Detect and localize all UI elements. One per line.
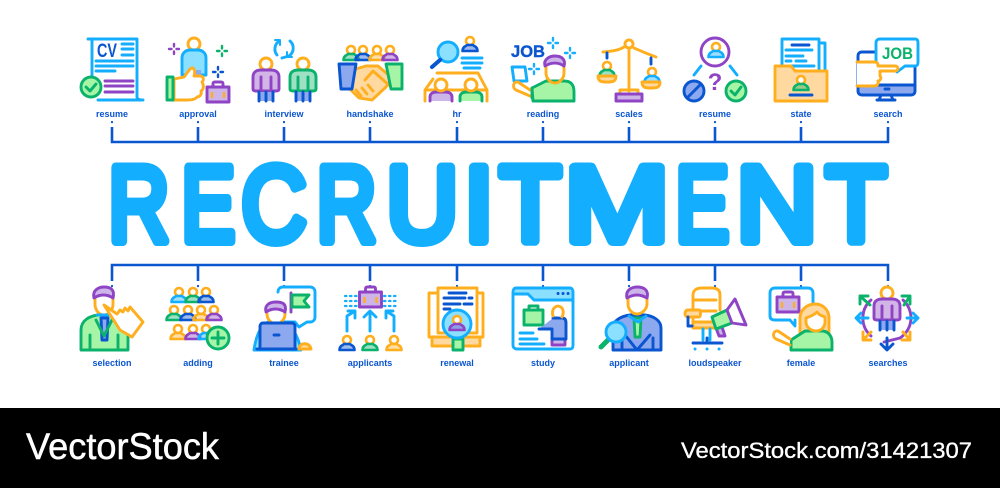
title: R [108,144,170,264]
labels: top row: resume [699,109,731,119]
labels: top row: handshake [346,109,394,119]
title: I [464,144,494,264]
icon: resume CV [81,39,143,100]
title: T [826,144,886,264]
labels: top row: approval [179,109,217,119]
icon: approval thumbs up [167,38,229,102]
icon: adding [166,288,229,349]
labels: bottom row: female [787,358,815,368]
icon: reading job: JOB [511,42,545,61]
icon: applicant [601,287,661,350]
icon: female [770,288,832,350]
icon: resume decision tree: ? [708,69,722,96]
labels: bottom row: adding [183,358,213,368]
icon: renewal [429,288,483,350]
title: C [242,144,306,264]
title: N [736,144,817,264]
labels: bottom row: applicants [348,358,392,368]
footer url: VectorStock.com/31421307 [681,438,972,463]
icon: searches [856,287,918,350]
connector: bottom tree [112,265,888,286]
icon: state folder [775,39,827,101]
labels: bottom row [92,358,908,368]
title: E [181,144,235,264]
labels: top row: search [873,109,903,119]
labels: bottom row: study [531,358,555,368]
labels: top row: state [790,109,812,119]
labels: bottom row: loudspeaker [688,358,742,368]
labels: top row: hr [452,109,462,119]
labels: bottom row: trainee [269,358,299,368]
icon: handshake [339,46,402,100]
icon: study [513,288,573,349]
labels: bottom row: applicant [609,358,649,368]
connector: top tree [112,122,888,142]
labels: bottom row: searches [868,358,908,368]
icon: interview [253,40,316,101]
icon: loudspeaker [685,288,746,349]
labels: top row [96,109,903,119]
labels: bottom row: selection [92,358,132,368]
title: R [316,144,376,264]
icon: resume decision tree [684,38,746,101]
icon: scales [598,40,660,101]
icon: applicants [340,287,402,350]
labels: top row: interview [264,109,305,119]
icon: reading job [511,38,575,101]
icon: search job [857,39,918,100]
labels: top row: resume [96,109,128,119]
labels: bottom row: renewal [440,358,474,368]
title: M [565,144,669,264]
title: T [500,144,561,264]
icon: hr [425,37,487,101]
icon: trainee [254,287,315,350]
footer band [0,408,1000,488]
icon: selection [81,287,143,350]
icon: resume CV: CV [97,41,117,62]
watermark logo text: VectorStock [26,426,219,467]
title: U [386,144,458,264]
labels: top row: reading [527,109,559,119]
labels: top row: scales [615,109,643,119]
title: E [675,144,729,264]
icon: search job: JOB [882,44,913,63]
